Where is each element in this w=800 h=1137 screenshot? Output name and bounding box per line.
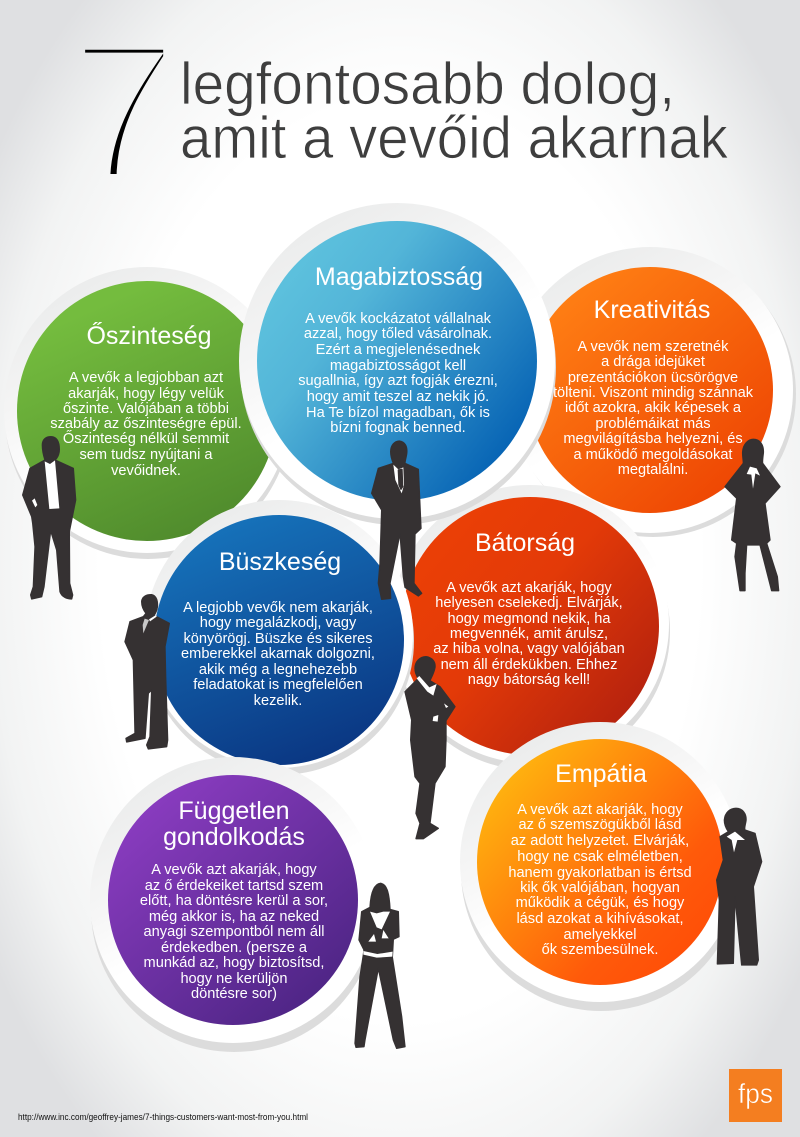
panel: Bátorság bbox=[391, 485, 670, 770]
text: Magabiztosság body: Ezért a megjelenésednek bbox=[316, 342, 481, 358]
icon: woman silhouette, Bátorság bbox=[405, 657, 455, 839]
text: Magabiztosság body: hogy amit teszel az nekik jó. bbox=[307, 389, 489, 405]
text: Empátia body: amelyekkel bbox=[564, 927, 636, 943]
text: Büszkeség body: könyörögj. Büszke és sikeres bbox=[184, 631, 372, 647]
icon: woman silhouette, Empátia bbox=[717, 808, 762, 965]
text: Magabiztosság body: azzal, hogy tőled vásárolnak. bbox=[304, 326, 492, 342]
heading: Független gondolkodás bbox=[163, 797, 305, 851]
text: Bátorság body: nem áll érdekükben. Ehhez bbox=[441, 657, 617, 673]
panel: Őszinteség bbox=[4, 267, 291, 559]
icon: woman silhouette, Kreativitás bbox=[725, 439, 780, 591]
text: Kreativitás body: tölteni. Viszont mindig szánnak bbox=[553, 385, 754, 401]
text: Empátia body: az adott helyzetet. Elvárják, bbox=[511, 833, 689, 849]
text: Kreativitás body bbox=[553, 339, 754, 478]
title line one: legfontosabb dolog, bbox=[180, 51, 675, 117]
text: Kreativitás body: megtalálni. bbox=[618, 462, 688, 478]
text: Magabiztosság body: sugallnia, így azt fogják érezni, bbox=[298, 373, 498, 389]
big numeral seven: 7 bbox=[69, 1, 179, 222]
source url: http://www.inc.com/geoffrey-james/7-things-customers-want-most-from-you.html bbox=[18, 1112, 308, 1123]
text: Empátia body: lásd azokat a kihívásokat, bbox=[516, 911, 684, 927]
icon: man silhouette, Büszkeség bbox=[125, 595, 169, 749]
text: Büszkeség body: A legjobb vevők nem akarják, bbox=[183, 600, 373, 616]
text: Magabiztosság body: magabiztosságot kell bbox=[330, 358, 466, 374]
text: Független gondolkodás body bbox=[140, 862, 328, 1002]
text: Őszinteség body bbox=[50, 370, 242, 479]
text: Független gondolkodás body: munkád az, hogy biztosítsd, bbox=[144, 955, 324, 971]
logo: fps: fps bbox=[738, 1078, 773, 1109]
text: Őszinteség body: szabály az őszinteségre épül. bbox=[50, 416, 242, 432]
text: Független gondolkodás body: még akkor is, ha az neked bbox=[149, 909, 319, 925]
text: Empátia body: kik ők valójában, hogyan bbox=[520, 880, 680, 896]
text: Bátorság body bbox=[433, 580, 625, 688]
panel: Büszkeség bbox=[145, 500, 414, 775]
text: Büszkeség body bbox=[181, 600, 375, 709]
text: Kreativitás body: a drága idejüket bbox=[601, 354, 705, 370]
text: Kreativitás body: időt azokra, akik képesek a bbox=[565, 400, 742, 416]
text: Független gondolkodás body: érdekedben. (persze a bbox=[161, 940, 308, 956]
heading: Független gondolkodás: Független bbox=[178, 797, 290, 825]
text: Büszkeség body: feladatokat is megfelelően bbox=[193, 677, 363, 693]
heading: Empátia: Empátia bbox=[555, 760, 647, 788]
icon: man silhouette, Magabiztosság bbox=[372, 441, 422, 599]
title line two: amit a vevőid akarnak bbox=[180, 105, 728, 171]
text: Magabiztosság body: bízni fognak benned. bbox=[330, 420, 466, 436]
text: Empátia body: az ő szemszögükből lásd bbox=[518, 817, 682, 833]
text: Őszinteség body: őszinte. Valójában a többi bbox=[63, 401, 229, 417]
text: Büszkeség body: akik még a legnehezebb bbox=[199, 662, 357, 678]
heading: Bátorság: Bátorság bbox=[475, 529, 575, 557]
text: Őszinteség body: A vevők a legjobban azt bbox=[69, 370, 223, 386]
text: Bátorság body: az hiba volna, vagy valójában bbox=[433, 641, 625, 657]
heading: Őszinteség: Őszinteség bbox=[86, 321, 212, 350]
text: Büszkeség body: emberekkel akarnak dolgozni, bbox=[181, 646, 375, 662]
text: Bátorság body: A vevők azt akarják, hogy bbox=[446, 580, 612, 596]
heading: Független gondolkodás: gondolkodás bbox=[163, 823, 305, 851]
text: Empátia body bbox=[508, 802, 692, 958]
text: Független gondolkodás body: anyagi szempontból nem áll bbox=[144, 924, 324, 940]
text: Független gondolkodás body: előtt, ha döntésre kerül a sor, bbox=[140, 893, 328, 909]
text: Empátia body: ők szembesülnek. bbox=[542, 942, 658, 958]
text: Független gondolkodás body: hogy ne kerüljön bbox=[180, 971, 288, 987]
text: Empátia body: hanem gyakorlatban is értsd bbox=[508, 865, 692, 881]
text: Magabiztosság body: Ha Te bízol magadban, ők is bbox=[306, 405, 490, 421]
text: Bátorság body: hogy megmond nekik, ha bbox=[447, 611, 611, 627]
text: Empátia body: A vevők azt akarják, hogy bbox=[517, 802, 683, 818]
text: Kreativitás body: prezentációkon ücsörögve bbox=[568, 370, 738, 386]
icon: man silhouette, Őszinteség bbox=[23, 437, 76, 599]
text: Kreativitás body: problémáikat más bbox=[595, 416, 711, 432]
text: Büszkeség body: hogy megalázkodj, vagy bbox=[200, 615, 357, 631]
heading: Büszkeség: Büszkeség bbox=[219, 548, 341, 576]
panel: Empátia bbox=[460, 722, 741, 1011]
text: Őszinteség body: akarják, hogy légy velük bbox=[68, 386, 225, 402]
text: Magabiztosság body bbox=[298, 311, 498, 436]
logo: fps bbox=[729, 1069, 782, 1122]
panel: Kreativitás bbox=[507, 247, 796, 537]
text: Kreativitás body: A vevők nem szeretnék bbox=[578, 339, 729, 355]
text: Független gondolkodás body: az ő érdekeiket tartsd szem bbox=[145, 878, 323, 894]
text: Kreativitás body: a működő megoldásokat bbox=[573, 447, 733, 463]
text: Őszinteség body: vevőidnek. bbox=[111, 463, 181, 479]
text: Őszinteség body: Őszinteség nélkül semmit bbox=[63, 430, 229, 447]
text: Bátorság body: helyesen cselekedj. Elvárják, bbox=[435, 595, 623, 611]
title bbox=[69, 1, 728, 222]
icon: woman silhouette, Független gondolkodás bbox=[355, 883, 405, 1048]
text: Magabiztosság body: A vevők kockázatot vállalnak bbox=[305, 311, 492, 327]
heading: Kreativitás: Kreativitás bbox=[594, 296, 710, 324]
text: Bátorság body: nagy bátorság kell! bbox=[468, 672, 590, 688]
panel: Magabiztosság bbox=[239, 203, 556, 525]
text: Empátia body: hogy ne csak elméletben, bbox=[517, 849, 683, 865]
text: Bátorság body: megvennék, amit árulsz, bbox=[450, 626, 608, 642]
text: Őszinteség body: sem tudsz nyújtani a bbox=[79, 447, 213, 463]
heading: Magabiztosság: Magabiztosság bbox=[315, 263, 483, 291]
text: Független gondolkodás body: döntésre sor) bbox=[191, 986, 277, 1002]
text: Büszkeség body: kezelik. bbox=[254, 693, 302, 709]
text: Kreativitás body: megvilágításba helyezni, és bbox=[563, 431, 743, 447]
text: Független gondolkodás body: A vevők azt akarják, hogy bbox=[151, 862, 317, 878]
text: Empátia body: működik a cégük, és hogy bbox=[516, 895, 685, 911]
panel: Független gondolkodás bbox=[90, 757, 377, 1052]
